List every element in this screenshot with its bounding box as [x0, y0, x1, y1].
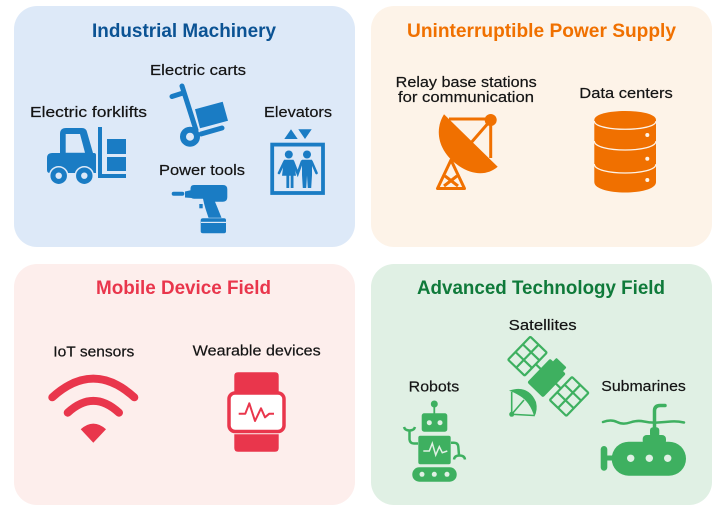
label: data centers: Data centers [579, 85, 673, 102]
icon: forklift [47, 127, 126, 185]
label: relay base stations: Relay base stations [396, 74, 537, 91]
icon: smartwatch [229, 372, 284, 452]
label: iot sensors: IoT sensors [53, 344, 134, 360]
panel: uninterruptible power supply [371, 6, 712, 247]
label: robots: Robots [409, 379, 459, 396]
icon: elevator [272, 129, 323, 193]
icon: power drill [172, 185, 227, 233]
label: power tools: Power tools [159, 162, 245, 179]
icon: robot [404, 400, 465, 482]
icon: satellite [506, 334, 591, 418]
label: for communication: for communication [398, 89, 534, 106]
icon: wifi [52, 379, 134, 443]
icon: database [594, 111, 656, 192]
heading: advanced technology field: Advanced Technology Field [417, 278, 665, 299]
icon: submarine [601, 406, 686, 476]
heading: uninterruptible power supply: Uninterruptible Power Supply [407, 21, 676, 42]
heading: mobile device field: Mobile Device Field [96, 278, 271, 299]
label: wearable devices: Wearable devices [193, 342, 321, 360]
label: electric carts: Electric carts [150, 62, 246, 79]
icon: satellite dish [438, 114, 498, 188]
panel: advanced technology field [371, 264, 712, 505]
label: submarines: Submarines [601, 378, 686, 395]
label: satellites: Satellites [509, 317, 577, 334]
panel: industrial machinery [14, 6, 355, 247]
panel: mobile device field [14, 264, 355, 505]
heading: industrial machinery: Industrial Machinery [92, 21, 276, 42]
label: elevators: Elevators [264, 104, 332, 121]
icon: hand cart [172, 86, 228, 144]
label: electric forklifts: Electric forklifts [30, 104, 147, 121]
